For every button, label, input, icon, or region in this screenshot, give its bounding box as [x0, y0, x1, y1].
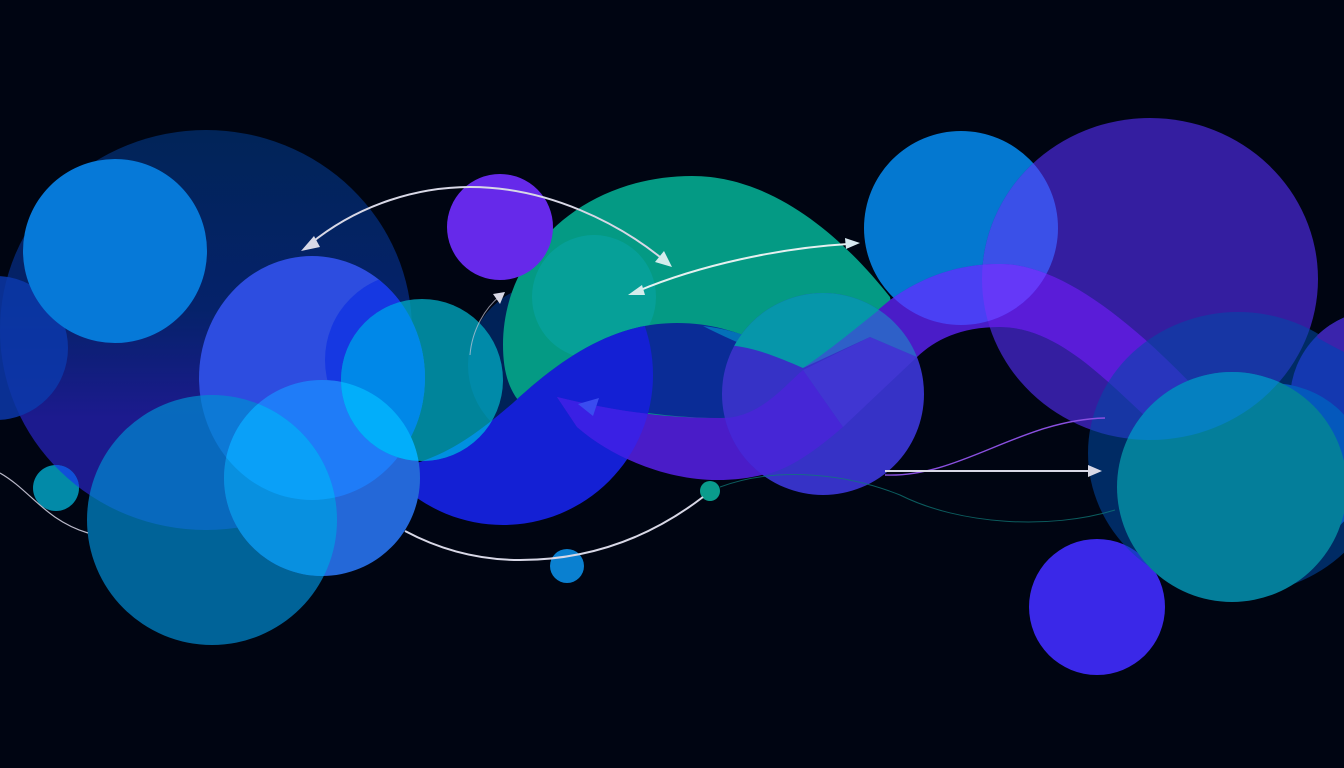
circle: large teal	[1117, 372, 1344, 602]
node: small green	[700, 481, 720, 501]
circle: teal middle	[341, 299, 503, 461]
overlap: bright blue and teal	[224, 457, 337, 576]
arrow: blue triangle	[578, 398, 599, 416]
ellipse: large right dark blue	[1088, 312, 1344, 594]
abstract composition	[0, 118, 1344, 675]
line: bottom arc	[405, 497, 703, 560]
arrow: small curved up	[470, 292, 505, 355]
circle: right edge blue	[1290, 310, 1344, 490]
shape: right edge violet corner	[1317, 318, 1344, 352]
circle: top right blue	[864, 131, 1058, 325]
blob: green	[503, 176, 891, 430]
circle: left edge blue	[0, 276, 68, 420]
overlap: blue and violet	[982, 163, 1058, 274]
ribbon: purple	[557, 264, 1188, 480]
node: small blue	[550, 549, 584, 583]
panel: centre green and blue forms	[418, 176, 890, 525]
panel: left circle cluster	[0, 130, 412, 530]
arrow: top arc	[301, 187, 672, 267]
ellipse: right inner blue	[1175, 383, 1344, 553]
circle: navy behind green	[468, 283, 632, 447]
circle: small indigo	[1029, 539, 1165, 675]
wave: navy blue	[390, 323, 810, 520]
circle: small purple	[447, 174, 553, 280]
circle: lower left teal blue	[87, 395, 337, 645]
circle: bright blue lower	[224, 380, 420, 576]
overlap: teal and violet	[341, 302, 425, 436]
circle: centre violet	[722, 293, 924, 495]
arrow: green double	[628, 238, 860, 295]
overlap: ribbon facets in centre violet	[725, 293, 917, 476]
crescent: bright blue	[325, 280, 400, 382]
overlap: teal and bright blue wave	[423, 420, 492, 461]
circle: large navy	[0, 130, 412, 530]
circle: large violet	[982, 118, 1318, 440]
overlap: teal and bright blue	[341, 382, 418, 461]
circle: bright blue	[418, 326, 653, 525]
line: teal thin	[720, 475, 1115, 522]
line: purple curve	[885, 418, 1105, 475]
overlap: teal and violet	[1128, 372, 1279, 440]
node: small teal left	[33, 465, 79, 511]
strip: lighter blue on wave	[703, 326, 803, 368]
circle: upper left light blue	[23, 159, 207, 343]
circle: inner teal	[532, 235, 656, 359]
panel: left overlapping circles	[87, 256, 503, 645]
line: left wave	[0, 473, 88, 533]
overlap: bright blue and violet	[258, 380, 398, 498]
ellipse: blue violet	[199, 256, 425, 500]
overlap: triple	[226, 404, 335, 500]
panel: purple ribbon and right shapes	[353, 118, 1344, 675]
arrow: straight horizontal	[885, 465, 1102, 477]
